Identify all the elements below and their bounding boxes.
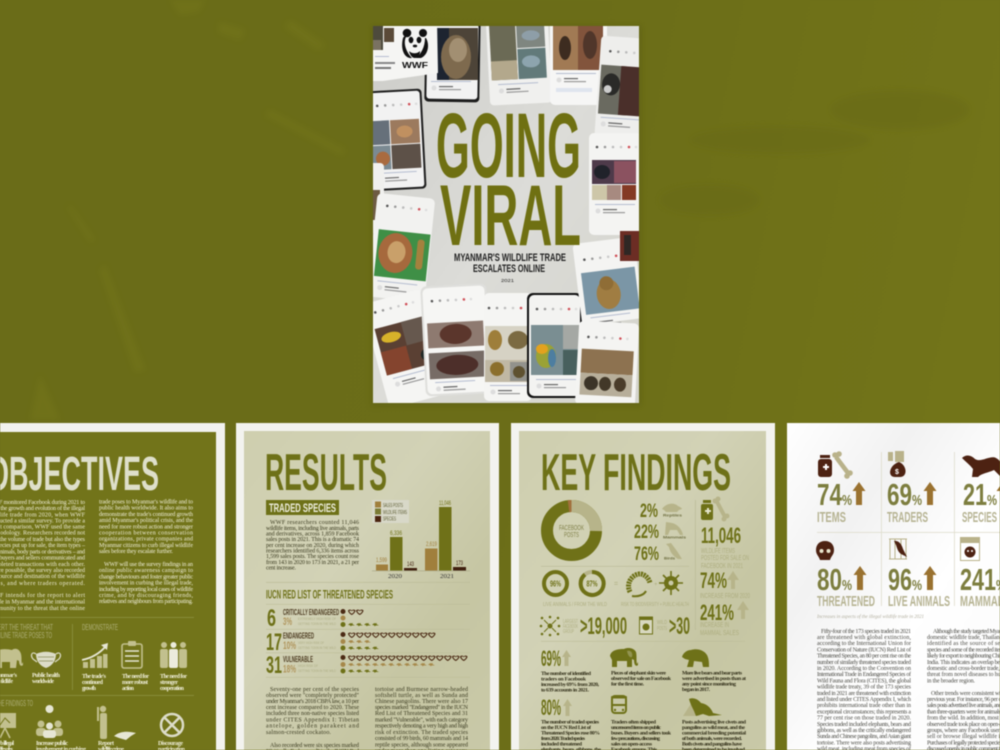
bar chart: 2020: [388, 574, 402, 580]
finding: bears: More live bears and bear parts: [682, 670, 743, 676]
heading: traded species: [266, 500, 339, 515]
icon: group of people: [160, 642, 187, 668]
icon: skull: [816, 541, 834, 560]
subtitle: ESCALATES ONLINE: [473, 263, 545, 275]
chart: from the wild ring: [580, 572, 604, 595]
finding: civets and pangolins: of both animals, were recorded.: [682, 736, 743, 742]
legend: WILDLIFE ITEMS: [383, 510, 407, 516]
stat: endangered: [266, 629, 436, 656]
stat: wildlife items: WILDLIFE ITEMS: [701, 548, 735, 555]
text block: summary left column: prohibits international trade other than in: [817, 703, 911, 709]
finding: civets and pangolins: Both civets and pangolins have: [682, 742, 743, 748]
phone: green tortoise: [372, 194, 435, 298]
label: public health: Public health: [32, 673, 61, 679]
text block: summary left column: gibbons, as well as the critically endangered: [817, 728, 911, 734]
phone: tortoises: [484, 293, 532, 401]
stat: 241 percent increase: [700, 600, 749, 637]
stat: critically endangered: GETTING TOXIN IN THE WILD: [298, 622, 336, 626]
stat: birds: Birds: [664, 556, 675, 560]
bar chart: 143: [407, 562, 414, 568]
icon: bottle and bone: [701, 496, 730, 522]
icon: wipe packet: [640, 617, 652, 634]
text block: results left column: [266, 686, 360, 750]
label: public health: worldwide: [32, 679, 54, 685]
finding: bears: any point since monitoring: [682, 682, 736, 688]
icon: reporting person with animal: [97, 706, 136, 740]
text block: summary left column: are threatened with global extinction,: [817, 635, 912, 641]
bar chart: 1,599: [376, 558, 387, 564]
finding: civets and pangolins: Posts advertising live civets and: [682, 720, 747, 726]
finding: traders increase: The number of identified: [541, 671, 592, 677]
stat: 241 percent increase: MAMMAL SALES: [700, 630, 739, 637]
text block: summary left column: number of similarly threatened species traded: [817, 659, 911, 666]
phone: left black frame: [372, 88, 428, 192]
stat: wild posts: POSTS: [657, 626, 667, 632]
bar chart: 2,619: [426, 542, 437, 548]
text block: results right column: tortoise and Burmese narrow-headed: [375, 687, 468, 693]
finding: traders increase: increased by 69% from 2020,: [541, 682, 600, 688]
text block: summary left column: Threatened Species, an 80 per cent rise on the: [817, 654, 911, 660]
stat: traders: 69: [887, 477, 912, 512]
stat: mammals: 22%: [634, 522, 659, 543]
finding: traders on buses: [611, 696, 672, 750]
phone: owl image: [424, 22, 481, 102]
text block: summary right column: in the broader region.: [927, 678, 976, 684]
finding: traders increase: [541, 646, 600, 694]
stat: live animals: %: [912, 577, 922, 594]
chart: live animals ring: 96%: [550, 580, 561, 588]
stat: species: 21: [963, 477, 987, 512]
panel: report cover: GOING: [436, 95, 581, 197]
stat: birds: 76%: [634, 544, 659, 565]
text block: right column: need for more robust action and stronger: [99, 524, 193, 530]
panel: key findings page: [511, 423, 775, 750]
stat: critically endangered: 3%: [283, 616, 292, 628]
title: Going Viral: VIRAL: [440, 168, 581, 264]
text block: results left column: antelope, golden parakeet and: [266, 724, 359, 730]
subtitle: MYANMAR'S WILDLIFE TRADE: [454, 252, 566, 264]
finding: traders on buses: sales on open-access: [611, 742, 653, 748]
stat: live animals: [888, 562, 950, 610]
text block: summary left column: and listed under CITES Appendix I, which: [817, 697, 911, 703]
stat: traders: [887, 477, 936, 526]
text block: results left column: Seventy-one per cent of the species: [270, 686, 360, 693]
text block: summary left column: Wild Fauna and Flora (CITES), the global: [817, 678, 911, 684]
finding: threatened species: included threatened: [541, 742, 583, 748]
label: robust action: action: [122, 686, 135, 692]
chart: facebook posts donut: POSTS: [564, 532, 579, 539]
icon: monkey packet: [960, 538, 980, 560]
stat: traders: TRADERS: [887, 509, 928, 526]
stat: largest facebook group: GROUP: [563, 629, 574, 635]
phone: left sliver: [372, 162, 385, 232]
text block: summary left column: in 2020. According to the Convention on: [817, 666, 911, 672]
text block: traded species intro: [266, 520, 360, 572]
panel: results page: [236, 423, 499, 750]
stat: threatened: %: [842, 577, 852, 594]
icon: clipboard: [122, 641, 142, 668]
bar chart: [372, 501, 470, 580]
icon: ferret: [962, 455, 1000, 477]
stat: vulnerable: VULNERABLE: [283, 654, 313, 664]
stat: wildlife items: [701, 523, 749, 570]
label: robust action: The need for: [122, 674, 149, 680]
label: continued growth: continued: [82, 680, 104, 686]
text block: results left column: Also recorded were six species marked: [270, 743, 359, 749]
label: Myanmar's wildlife: [0, 673, 18, 685]
finding: traders on buses: few precautions, discussing: [611, 736, 660, 742]
stat: threatened: THREATENED: [817, 593, 875, 610]
text block: right column: relatives and neighbours from participating.: [99, 598, 194, 605]
icon: discourage participation: [161, 714, 183, 736]
stat: threatened: [817, 562, 875, 610]
text block: right column: crime, and by discouraging friends,: [99, 592, 194, 599]
text block: results left column: salmon-crested cockatoo.: [266, 730, 332, 736]
subtitle: [454, 252, 566, 283]
finding: traders on buses: Traders often shipped: [611, 720, 657, 726]
text block: right column: including by reporting local cases of wildlife: [99, 586, 193, 593]
text block: right column: sales before they escalate further.: [99, 548, 174, 555]
label: continued growth: growth: [82, 686, 97, 692]
phone: right upper collage: [589, 133, 641, 235]
phone: black frame with parrot: [527, 293, 582, 398]
panel: report cover: [372, 25, 640, 404]
stat: vulnerable: 31: [266, 652, 282, 679]
stat: live animals: 96: [888, 562, 912, 597]
stat: live animals: LIVE ANIMALS: [888, 593, 950, 610]
finding: threatened species: on the IUCN Red List of: [541, 725, 591, 731]
icon: WWF panda logo: [402, 29, 428, 70]
bar chart: 6,336: [390, 531, 403, 537]
label: stronger cooperation: [160, 674, 187, 692]
text block: summary left column: traded in 2021 are threatened with extinction: [817, 691, 911, 697]
chart: live animals ring: [544, 572, 567, 595]
text block: traded species intro: WWF researchers counted 11,046: [270, 520, 359, 526]
text block: traded species intro: 1,599 sales posts. The species count rose: [266, 554, 359, 560]
text block: traded species intro: sales posts in 2021. This is a dramatic 74: [266, 537, 359, 543]
text block: traded species intro: from 143 in 2020 to 173 in 2021, a 21 per: [266, 559, 359, 566]
text block: left column: [0, 500, 86, 612]
heading: demonstrate: DEMONSTRATE: [82, 623, 118, 632]
text block: right column: online public awareness campaign to: [99, 568, 193, 574]
stat: vulnerable: [266, 652, 468, 679]
finding: threatened species: The number of traded species: [541, 720, 600, 726]
label: stronger cooperation: The need for: [160, 674, 187, 680]
stat: traders: %: [912, 492, 922, 509]
stat: items: %: [842, 492, 852, 509]
panel: summary page: [787, 423, 1000, 750]
finding: threatened species: from 2020. Traded species: [541, 736, 586, 742]
text block: summary left column: according to the International Union for: [817, 640, 911, 647]
text block: summary left column: Sunda and Chinese pangolins, and Asian giant: [817, 734, 911, 740]
legend: SALES POSTS: [383, 503, 403, 509]
phone: dark video post: [594, 36, 640, 134]
heading: alert the threat: [0, 623, 53, 640]
text block: results left column: under CITES Appendix I: Tibetan: [266, 718, 359, 724]
text block: right column: amid Myanmar's political crisis, and the: [99, 518, 193, 524]
finding: threatened species: Threatened Species rose 80%: [541, 730, 600, 736]
icon: bird in cage: [889, 539, 907, 559]
stat: wildlife items: POSTED FOR SALE ON: [701, 555, 749, 562]
text block: right column: cooperation between conservation: [99, 530, 193, 536]
label: action row: Discourage: [158, 741, 183, 747]
heading: key findings: KEY FINDINGS: [541, 444, 731, 502]
label: risk to biodiversity: RISK TO BIODIVERSITY + PUBLIC HEALTH: [621, 602, 689, 608]
stat: largest facebook group: >19,000: [580, 613, 627, 640]
heading: IUCN red list: IUCN RED LIST OF THREATENED SPECIES: [266, 590, 393, 602]
text block: traded species intro: cent increase.: [266, 566, 296, 572]
finding: traders increase: to 639 accounts in 2021.: [541, 688, 590, 694]
stat: wild posts: WILD: [657, 620, 667, 626]
text block: summary left column: [817, 628, 912, 750]
finding: traders on buses: buses. Buyers and sellers took: [611, 730, 672, 736]
text block: results right column: respectively denoting a very high and high: [375, 724, 468, 730]
finding: elephant skin: [610, 648, 672, 688]
stat: wildlife items: FACEBOOK IN 2021: [701, 563, 743, 570]
stat: 74 percent increase: INCREASE FROM 2020: [700, 593, 750, 600]
phone: meat photos: [420, 285, 486, 396]
stat: endangered: 17: [266, 629, 282, 656]
icon: WWF panda logo: WWF: [402, 60, 428, 70]
icon: face mask: [32, 652, 60, 668]
label: action row: Increase public: [36, 741, 68, 747]
text block: right column: involvement in curbing the illegal trade,: [99, 580, 194, 586]
finding: civets and pangolins: [682, 698, 747, 750]
phone card: top left with WWF logo: [373, 20, 438, 81]
chart: from the wild ring: 87%: [586, 580, 598, 588]
text block: results right column: Chinese pangolins. There were also 17: [375, 699, 468, 705]
stat: wildlife items: 11,046: [701, 523, 741, 548]
text block: right column: change behaviours and foster greater public: [99, 574, 193, 580]
title: Going Viral: [437, 112, 580, 246]
label: robust action: more robust: [122, 680, 148, 686]
phone: brown animals: [550, 20, 607, 105]
text block: traded species intro: and derivatives, across 1,859 Facebook: [266, 532, 359, 538]
legend: [372, 500, 409, 523]
bar chart: 2021: [440, 574, 454, 580]
stat: items: 74: [817, 477, 843, 512]
phone: tilted bottom left: [372, 298, 436, 404]
legend: SPECIES: [383, 516, 396, 522]
chart: facebook posts donut: [547, 506, 596, 555]
stat: critically endangered: 6: [267, 605, 276, 632]
stat: threatened: 80: [817, 562, 842, 597]
finding: traders increase: traders on Facebook: [541, 676, 587, 682]
text block: summary left column: Fifty-four of the 173 species traded in 2021: [821, 628, 911, 635]
text block: right column: trade poses to Myanmar's wildlife and to: [99, 498, 193, 506]
stat: largest facebook group: FACEBOOK: [563, 624, 578, 630]
stat: critically endangered: CRITICALLY ENDANGERED: [283, 607, 339, 617]
text block: traded species intro: researchers identified 6,336 items across: [266, 548, 360, 554]
finding: traders on buses: uncensored items on public: [611, 725, 662, 731]
finding: bears: [682, 649, 746, 693]
text block: summary left column: Conservation of Nature (IUCN) Red List of: [817, 646, 911, 654]
text block: traded species intro: wildlife items, including live animals, parts: [266, 525, 360, 532]
icon: network dots: [540, 616, 560, 636]
phone: blue grey photos: [486, 25, 550, 106]
stat: endangered: GETTING TOXIN IN THE WILD: [298, 646, 336, 650]
icon: presentation board: [0, 713, 16, 738]
panel: key findings page: =: [614, 581, 618, 588]
stat: vulnerable: 18%: [283, 664, 296, 676]
text block: summary left column: Species traded included elephants, bears and: [817, 722, 911, 728]
stat: endangered: 10%: [283, 640, 296, 652]
icon: elephant: [0, 649, 23, 668]
icon: virus: [659, 571, 683, 595]
icon: lizard: [629, 574, 650, 596]
text block: traded species intro: per cent increase on 2020, during which: [266, 543, 359, 549]
stat: endangered: ENDANGERED: [283, 630, 314, 640]
finding: elephant skin: Pieces of elephant skin were: [611, 670, 667, 676]
photo: corner animal: [620, 231, 639, 261]
heading: results: RESULTS: [265, 444, 387, 502]
finding: elephant skin: for the first time.: [611, 682, 645, 688]
panel: objectives page: [0, 423, 225, 750]
icon: growth chart: [82, 643, 108, 668]
stat: critically endangered: EXTREMELY HIGH RISK OF: [298, 617, 337, 621]
stat: vulnerable: HIGH RISK OF: [298, 664, 319, 668]
stat: mammals: Mammals: [663, 536, 686, 540]
text block: results right column: softshell turtle, as well as Sunda and: [375, 692, 468, 699]
stat: critically endangered: [267, 605, 379, 632]
finding: civets and pangolins: commercial breeding potential: [682, 730, 746, 736]
text block: results left column: included three non-native species listed: [266, 711, 359, 717]
stat: wild posts: [657, 613, 690, 640]
chart: facebook posts donut: FACEBOOK: [559, 525, 584, 532]
text block: results left column: under Myanmar's 2018 CBPA law, a 10 per: [266, 699, 359, 705]
text block: right column: Myanmar citizens to curb illegal wildlife: [99, 542, 193, 549]
text block: right column: public health worldwide. It also aims to: [99, 506, 193, 512]
text block: results right column: species marked "Endangered" in the IUCN: [375, 705, 469, 711]
text block: summary left column: wildlife trade treaty, 39 of the 173 species: [817, 684, 912, 690]
finding: bears: were advertised in posts than at: [682, 676, 746, 682]
text block: right column: demonstrate the trade's continued growth: [99, 512, 193, 518]
panel: key findings page: +: [654, 582, 658, 588]
text block: summary left column: tortoise. There were also posts advertising: [817, 740, 911, 746]
finding: elephant skin: observed for sale on Facebook: [611, 676, 672, 682]
heading: traded species: TRADED SPECIES: [269, 501, 336, 515]
label: continued growth: The trade's: [82, 674, 107, 680]
icon: cash and money bag: [888, 451, 906, 477]
label: continued growth: [82, 674, 107, 692]
text block: summary left column: International Trade in Endangered Species of: [817, 671, 911, 678]
text block: right column: organizations, private companies and: [99, 536, 193, 542]
subtitle: 2021: [501, 278, 515, 283]
label: stronger cooperation: stronger: [160, 680, 178, 686]
stat: endangered: VERY HIGH RISK OF: [298, 641, 324, 645]
bar chart: 11,046: [439, 501, 451, 507]
text block: results right column: risk of extinction. The traded species: [375, 729, 469, 736]
label: public health: [32, 673, 61, 685]
stat: vulnerable: GETTING TOXIN IN THE WILD: [298, 669, 336, 673]
stat: largest facebook group: [563, 613, 627, 640]
stat: items: [817, 477, 866, 526]
stat: species: %: [987, 492, 997, 509]
text block: results right column: marked "Vulnerable", with each category: [375, 718, 468, 724]
text block: results right column: Red List of Threatened Species and 31: [375, 710, 468, 717]
text block: results right column: consisted of 99 birds, 60 mammals and 14: [375, 735, 468, 742]
stat: 74 percent increase: 74%: [700, 568, 727, 593]
stat: largest facebook group: LARGEST: [563, 619, 578, 625]
caption: Increases in aspects of the illegal wildlife trade in 2021: [816, 615, 924, 620]
stat: reptiles: 2%: [640, 501, 658, 522]
phone: tortoise pile: [575, 320, 639, 407]
icon: public involvement: [36, 705, 63, 738]
bar chart: 173: [456, 561, 463, 567]
icon: medicine and bone: [818, 451, 853, 479]
text block: results right column: reptile species, although some appeared: [375, 742, 468, 748]
text block: right column: [99, 498, 194, 605]
icon: cash and money bag: $: [895, 469, 899, 476]
label: action row: Report: [98, 741, 114, 747]
label: robust action: [122, 674, 149, 692]
text block: summary left column: 77 per cent rise on those traded in 2020.: [817, 716, 912, 722]
stat: 241 percent increase: INCREASE IN: [700, 622, 729, 629]
stat: 74 percent increase: [700, 568, 750, 600]
label: stronger cooperation: cooperation: [160, 686, 185, 692]
text block: results right column: [375, 687, 469, 750]
text block: results left column: observed were "completely protected": [266, 693, 360, 699]
stat: 241 percent increase: 241%: [700, 600, 734, 625]
text block: summary right column: [927, 629, 1000, 750]
finding: threatened species: [541, 695, 602, 750]
stat: wild posts: >30: [669, 613, 690, 640]
finding: traders increase: 69%: [541, 646, 561, 671]
finding: civets and pangolins: pangolins as wild meat, and the: [682, 725, 746, 731]
stat: items: ITEMS: [817, 509, 846, 526]
finding: threatened species: 80%: [541, 695, 561, 720]
text block: summary left column: exceptional circumstances; this represents a: [817, 710, 911, 716]
label: live animals / from the wild: LIVE ANIMALS / FROM THE WILD: [543, 602, 607, 608]
phone: right cat: [572, 238, 640, 324]
label: action row: [0, 741, 186, 750]
finding: bears: began in 2017.: [682, 687, 711, 693]
stat: species: [962, 477, 1000, 526]
stat: reptiles: [640, 501, 682, 522]
text block: right column: WWF will use the survey findings in an: [104, 561, 193, 568]
stat: reptiles: Reptiles: [663, 514, 682, 518]
text block: results left column: cent increase compared to 2020. These: [266, 705, 359, 711]
